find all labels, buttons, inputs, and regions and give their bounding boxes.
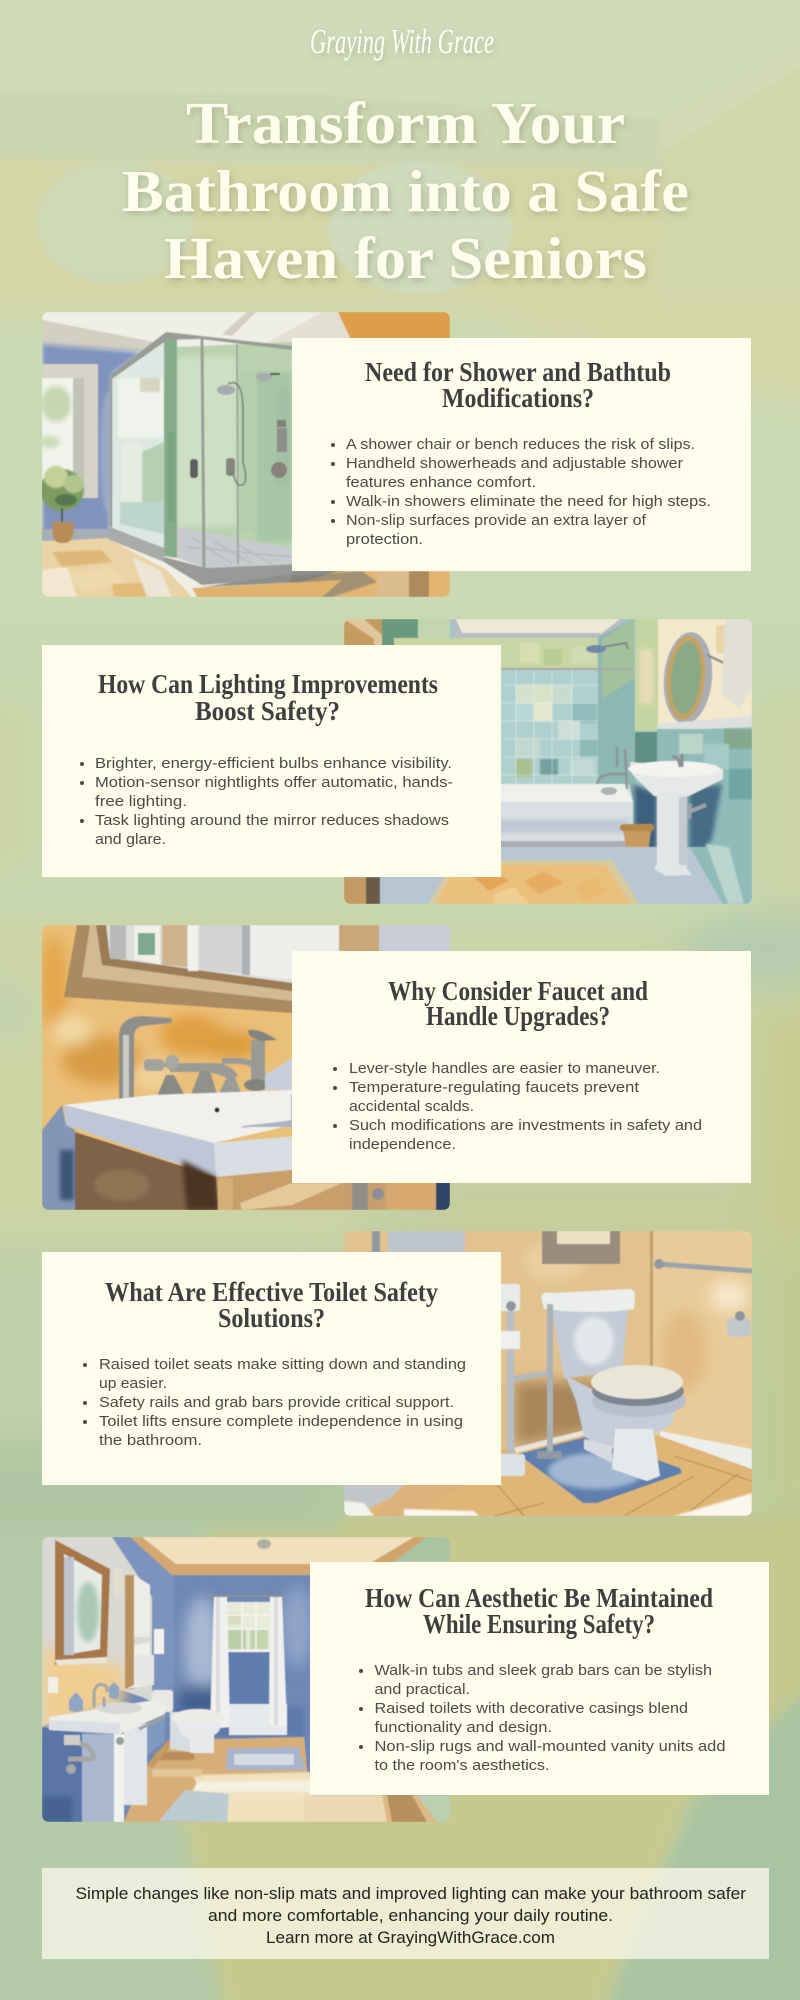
heading: faucet: Why Consider Faucet and xyxy=(388,976,648,1006)
footer callout: Learn more at GrayingWithGrace.com xyxy=(266,1928,555,1947)
heading: toilet xyxy=(105,1277,438,1333)
bullet list: aesthetic: and practical. xyxy=(374,1682,470,1698)
heading: aesthetic: How Can Aesthetic Be Maintained xyxy=(365,1583,713,1613)
panel: toilet safety solutions xyxy=(42,1252,501,1485)
bullet list: faucet xyxy=(333,1061,702,1153)
bullet list: shower: Handheld showerheads and adjustable shower xyxy=(346,456,683,472)
title: Haven for Seniors xyxy=(164,225,647,291)
footer callout xyxy=(42,1868,769,1959)
bullet list: aesthetic: functionality and design. xyxy=(374,1720,552,1736)
bullet list: faucet: Temperature-regulating faucets prevent xyxy=(349,1080,639,1096)
bullet list: faucet: Lever-style handles are easier to maneuver. xyxy=(349,1061,660,1077)
bullet list: toilet: Raised toilet seats make sitting down and standing xyxy=(99,1357,466,1373)
heading: toilet: Solutions? xyxy=(218,1303,325,1333)
brand name: Graying With Grace xyxy=(310,22,494,61)
bullet list: lighting: free lighting. xyxy=(95,794,187,810)
illustration: tiled bathroom with pedestal sink xyxy=(344,619,752,904)
bullet list: faucet: Such modifications are investments in safety and xyxy=(349,1118,702,1134)
heading: lighting: Boost Safety? xyxy=(195,696,340,726)
heading: shower xyxy=(365,357,671,413)
bullet list: lighting: Motion-sensor nightlights offer automatic, hands- xyxy=(95,775,453,791)
heading: faucet xyxy=(388,976,648,1031)
panel: aesthetic maintained with safety xyxy=(310,1562,769,1795)
illustration: glass walk-in shower xyxy=(40,312,450,597)
bullet list: aesthetic: Walk-in tubs and sleek grab bars can be stylish xyxy=(374,1663,712,1679)
panel: lighting improvements xyxy=(42,645,501,877)
bullet list: shower xyxy=(331,437,711,548)
bullet list: aesthetic xyxy=(359,1663,726,1774)
illustration: toilet with safety rails xyxy=(344,1231,752,1516)
heading: toilet: What Are Effective Toilet Safety xyxy=(105,1277,438,1307)
bullet list: lighting: Task lighting around the mirror reduces shadows xyxy=(95,813,449,829)
bullet list: faucet: accidental scalds. xyxy=(349,1099,474,1115)
panel: faucet and handle upgrades xyxy=(292,951,751,1183)
bullet list: aesthetic: Non-slip rugs and wall-mounted vanity units add xyxy=(374,1739,726,1755)
bullet list: lighting: Brighter, energy-efficient bulbs enhance visibility. xyxy=(95,756,452,772)
heading: aesthetic: While Ensuring Safety? xyxy=(423,1609,655,1639)
footer callout: and more comfortable, enhancing your daily routine. xyxy=(208,1906,613,1925)
heading: lighting xyxy=(98,669,438,726)
bullet list: toilet xyxy=(83,1357,466,1449)
bullet list: toilet: Safety rails and grab bars provide critical support. xyxy=(99,1395,454,1411)
title xyxy=(122,90,689,291)
bullet list: aesthetic: Raised toilets with decorative casings blend xyxy=(374,1701,688,1717)
heading: aesthetic xyxy=(365,1583,713,1639)
bullet list: aesthetic: to the room's aesthetics. xyxy=(374,1758,550,1774)
bullet list: shower: protection. xyxy=(346,532,423,548)
heading: lighting: How Can Lighting Improvements xyxy=(98,669,438,699)
title: Bathroom into a Safe xyxy=(122,158,689,224)
bullet list: shower: A shower chair or bench reduces the risk of slips. xyxy=(346,437,695,453)
bullet list: faucet: independence. xyxy=(349,1137,456,1153)
title: Transform Your xyxy=(186,90,625,156)
illustration: blue bathroom with window xyxy=(42,1537,450,1822)
heading: faucet: Handle Upgrades? xyxy=(426,1001,610,1031)
bullet list: toilet: the bathroom. xyxy=(99,1433,202,1449)
heading: shower: Modifications? xyxy=(442,383,594,413)
bullet list: toilet: up easier. xyxy=(99,1376,167,1392)
bullet list: shower: features enhance comfort. xyxy=(346,475,536,491)
bullet list: lighting: and glare. xyxy=(95,832,166,848)
bullet list: lighting xyxy=(80,756,453,848)
heading: shower: Need for Shower and Bathtub xyxy=(365,357,671,387)
bullet list: toilet: Toilet lifts ensure complete independence in using xyxy=(99,1414,463,1430)
panel: shower and bathtub modifications xyxy=(292,338,751,571)
footer callout: Simple changes like non-slip mats and improved lighting can make your bathroom safer xyxy=(76,1884,746,1903)
bullet list: shower: Non-slip surfaces provide an extra layer of xyxy=(346,513,647,529)
bullet list: shower: Walk-in showers eliminate the need for high steps. xyxy=(346,494,711,510)
illustration: lever faucet on vanity xyxy=(40,925,450,1210)
